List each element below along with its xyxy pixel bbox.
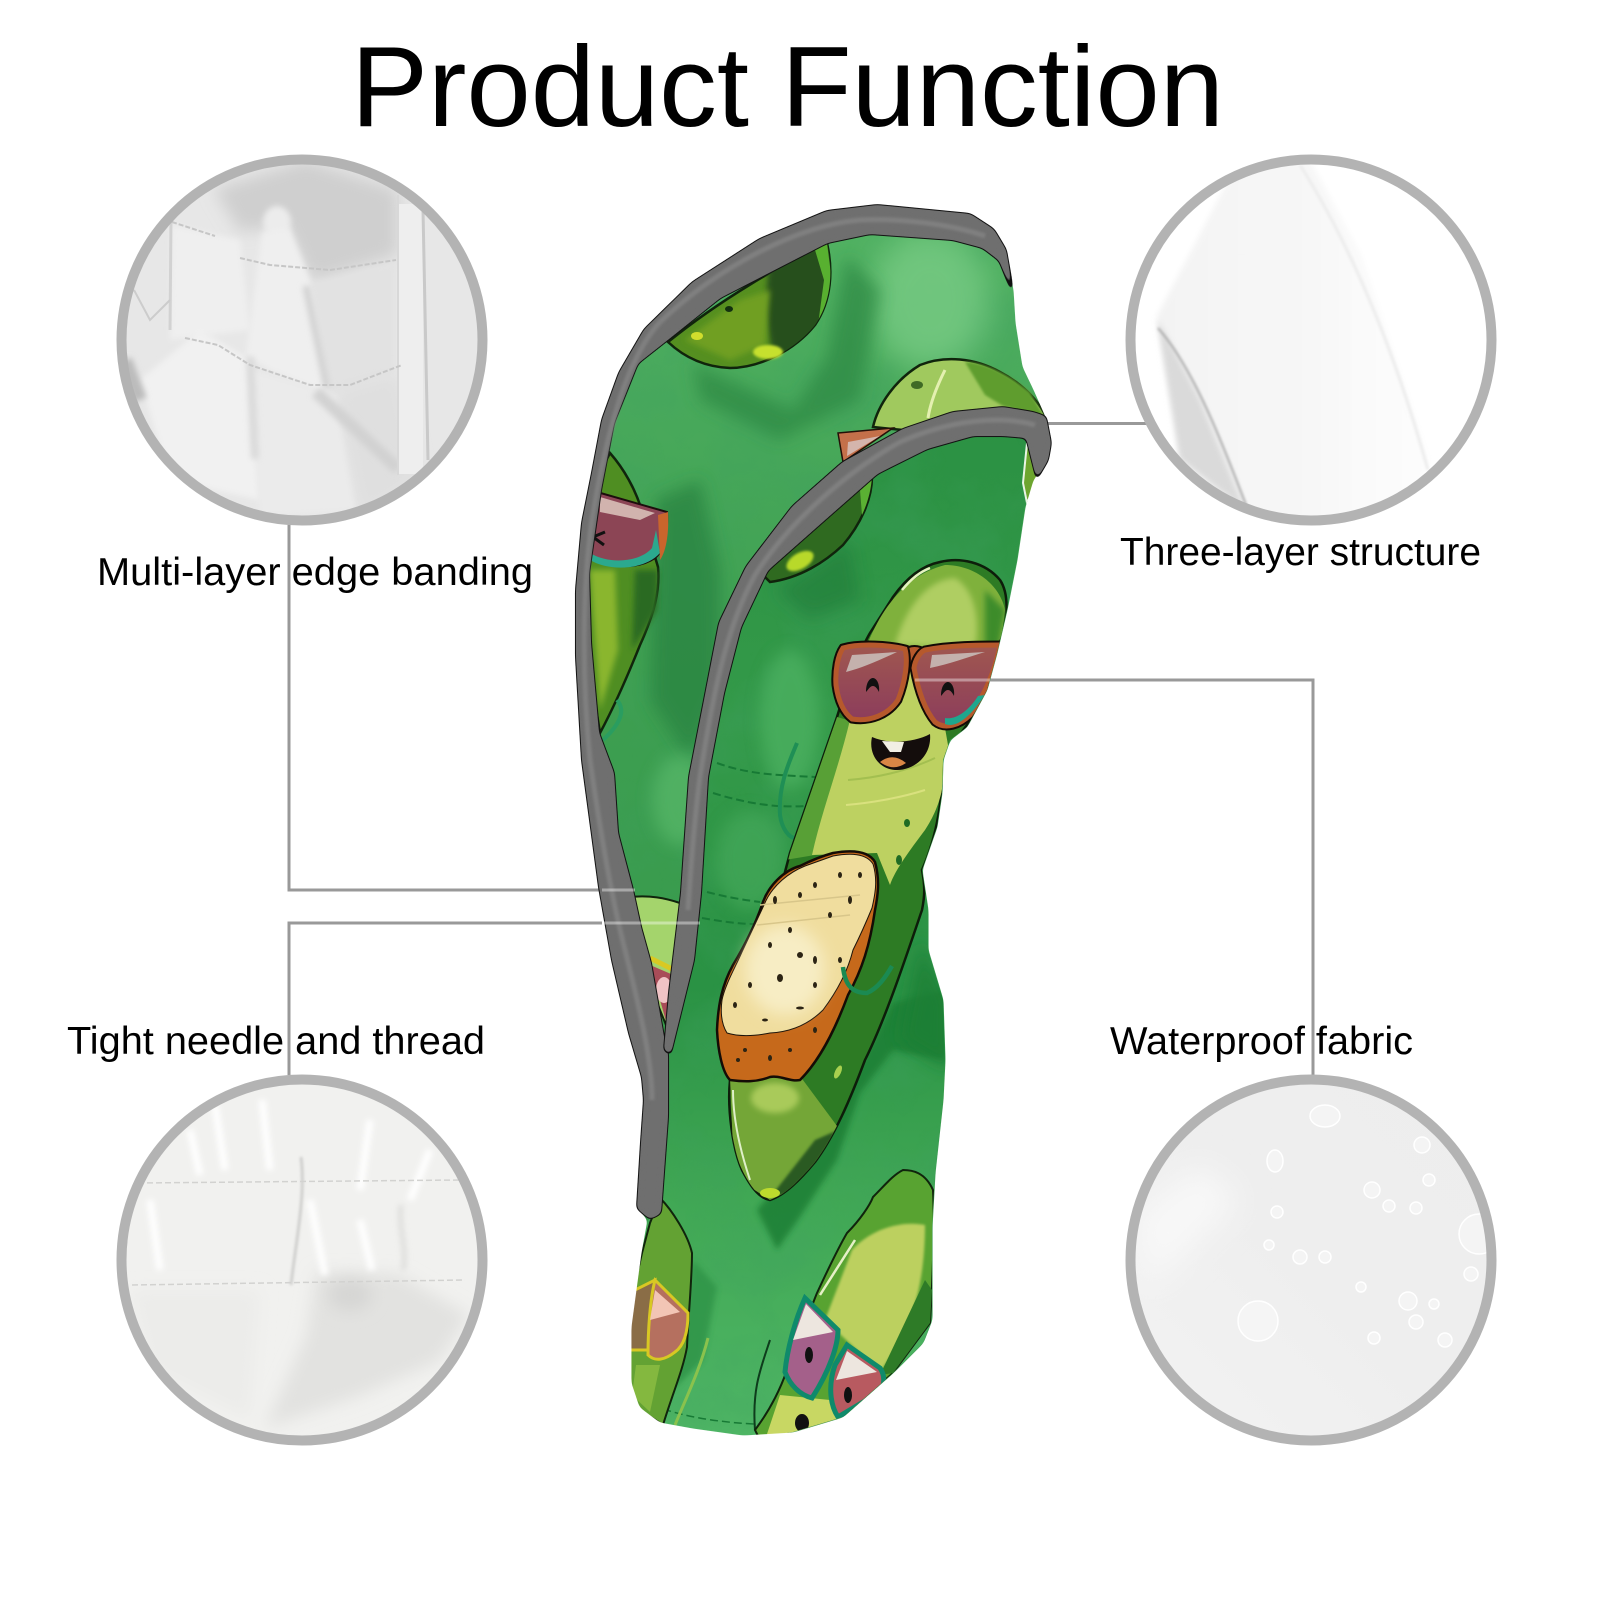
panel: tight needle and thread detail xyxy=(120,1080,484,1444)
icon: toast xyxy=(717,851,878,1081)
pickle: behind flap top right xyxy=(873,359,1047,430)
panel: waterproof fabric detail xyxy=(1125,1075,1499,1447)
pickle: bottom right with sunglasses xyxy=(755,1170,934,1440)
pickle: lower between bindings xyxy=(635,895,679,1026)
binding: outer grey edge xyxy=(577,206,1012,1218)
label: tight needle and thread: Tight needle and thread xyxy=(67,1020,485,1063)
icon: small stem bottom xyxy=(675,1338,708,1425)
sunglasses: left pickle xyxy=(590,490,668,568)
pickle: below flap xyxy=(760,477,872,582)
label: waterproof fabric: Waterproof fabric xyxy=(1110,1020,1413,1063)
icon: hand holding toast xyxy=(843,966,892,993)
panel: three-layer structure detail xyxy=(1125,155,1497,527)
connector lines xyxy=(289,424,1313,1075)
title: Product Function xyxy=(351,24,1224,151)
pickle: right edge fragment xyxy=(1022,442,1036,504)
panel: front panel fabric xyxy=(620,420,1050,1450)
icon: smiling mouth xyxy=(871,734,930,770)
sunglasses: bottom right xyxy=(785,1298,884,1432)
binding: flap grey edge xyxy=(665,408,1050,1053)
label: three-layer structure: Three-layer structure xyxy=(1120,531,1481,574)
panel: back panel fabric xyxy=(600,235,1040,1433)
sunglasses: main pickle xyxy=(836,645,1000,726)
label: multi-layer edge banding: Multi-layer edge banding xyxy=(97,551,533,594)
sunglasses fragment xyxy=(838,428,893,462)
stitching xyxy=(652,763,815,1425)
icon: thin arm bottom xyxy=(754,1340,770,1430)
pickle: bottom left with sunglasses xyxy=(625,1198,692,1425)
panel: multi-layer edge banding detail xyxy=(120,160,484,520)
pickle: top left under binding xyxy=(666,244,832,370)
icon: arm of main pickle xyxy=(780,743,797,838)
connector overlays across product xyxy=(602,680,990,923)
pickle: left side with sunglasses xyxy=(585,453,658,740)
product: pickle print golf headcover xyxy=(570,200,1060,1450)
pickle: main character with toast xyxy=(729,560,1006,1200)
